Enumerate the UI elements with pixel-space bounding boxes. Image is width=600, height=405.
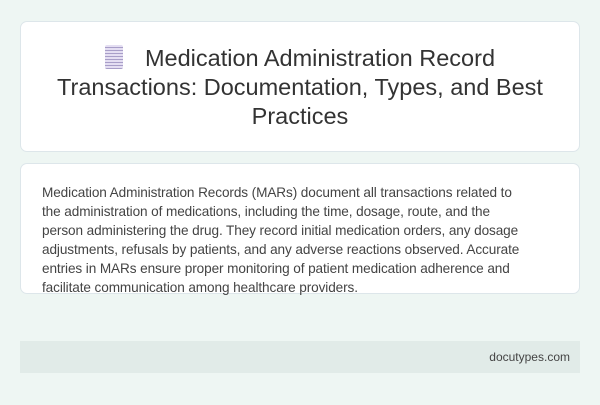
panel: title bbox=[20, 21, 580, 152]
text block bbox=[42, 185, 519, 295]
footer bbox=[20, 341, 580, 373]
footer: docutypes.com bbox=[489, 350, 570, 364]
text block: facilitate communication among healthcare providers. bbox=[42, 280, 358, 295]
text block: person administering the drug. They record initial medication orders, any dosage bbox=[42, 223, 518, 238]
text block: entries in MARs ensure proper monitoring of patient medication adherence and bbox=[42, 261, 510, 276]
heading: Medication Administration Record Transactions: Documentation, Types, and Best Practices bbox=[57, 45, 543, 129]
text block: adjustments, refusals by patients, and any adverse reactions observed. Accurate bbox=[42, 242, 519, 257]
text block: the administration of medications, including the time, dosage, route, and the bbox=[42, 204, 490, 219]
text block: Medication Administration Records (MARs) document all transactions related to bbox=[42, 185, 512, 200]
panel: description bbox=[20, 163, 580, 294]
